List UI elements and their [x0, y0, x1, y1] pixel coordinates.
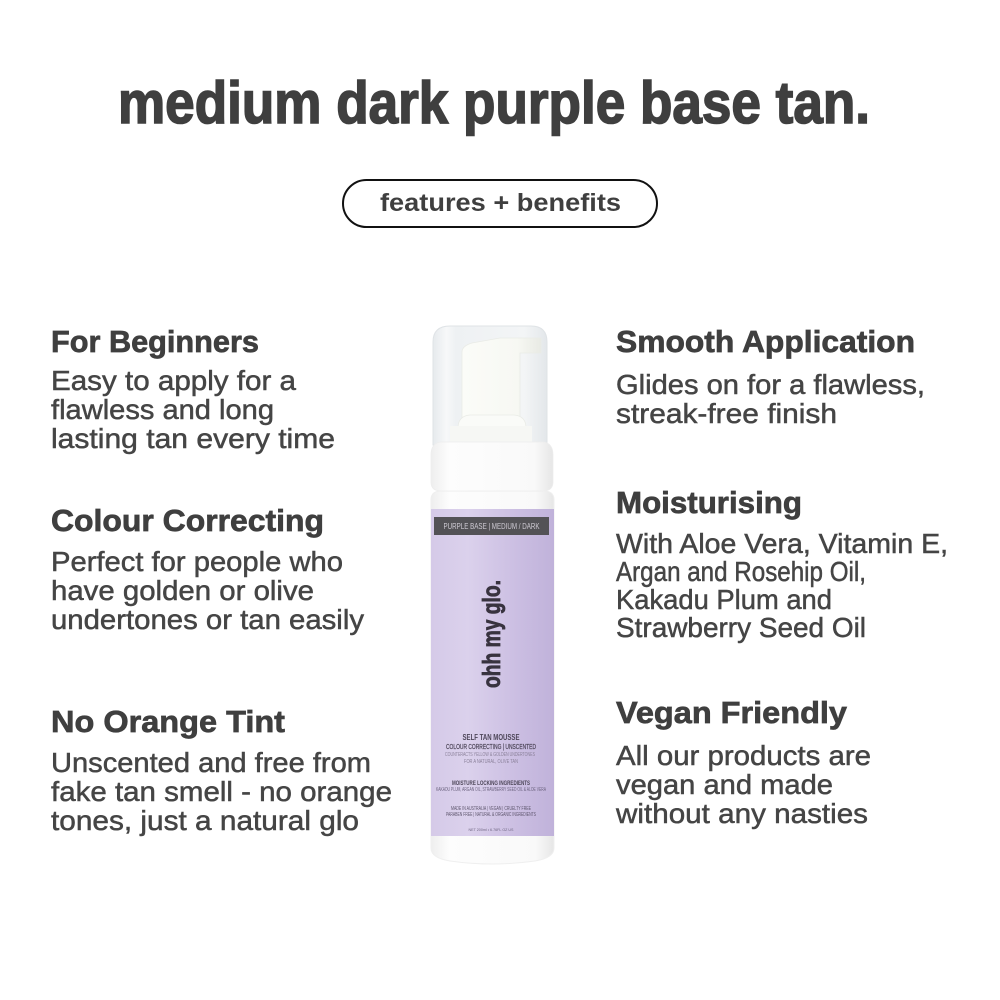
feature: For Beginners: Easy to apply for a [51, 365, 296, 396]
feature: Moisturising: Argan and Rosehip Oil, [616, 556, 866, 587]
title: medium dark purple base tan. [118, 70, 870, 136]
feature: Vegan Friendly: vegan and made [616, 769, 833, 800]
label copy [436, 733, 546, 832]
feature: Smooth Application: Glides on for a flawless, [616, 369, 925, 400]
label copy: FOR A NATURAL, OLIVE TAN [464, 759, 518, 765]
feature: No Orange Tint: No Orange Tint [51, 704, 285, 739]
feature: No Orange Tint [51, 704, 392, 836]
feature: For Beginners: flawless and long [51, 394, 274, 425]
feature: Moisturising: Kakadu Plum and [616, 584, 832, 615]
feature: For Beginners [51, 324, 335, 454]
label copy: MOISTURE LOCKING INGREDIENTS [452, 781, 530, 787]
feature: Moisturising: With Aloe Vera, Vitamin E, [616, 528, 948, 559]
feature: Colour Correcting: Perfect for people who [51, 546, 343, 577]
label copy: COUNTERACTS YELLOW & GOLDEN UNDERTONES [445, 752, 535, 758]
bottle body [431, 491, 554, 864]
feature: Moisturising: Strawberry Seed Oil [616, 612, 866, 643]
feature: No Orange Tint: Unscented and free from [51, 747, 371, 778]
label copy: MADE IN AUSTRALIA | VEGAN | CRUELTY FREE [451, 806, 531, 812]
feature: For Beginners: For Beginners [51, 324, 259, 359]
feature: Moisturising: Moisturising [616, 485, 802, 520]
feature: Vegan Friendly [615, 695, 871, 829]
feature: For Beginners: lasting tan every time [51, 423, 335, 454]
label copy: NET 200ml • 6.76FL OZ US [468, 827, 514, 832]
purple label [431, 509, 554, 836]
product: mousse bottle [431, 326, 554, 864]
feature: Colour Correcting: Colour Correcting [51, 503, 324, 538]
label copy: COLOUR CORRECTING | UNSCENTED [446, 744, 536, 751]
feature: Vegan Friendly: without any nasties [615, 798, 868, 829]
feature: Colour Correcting: undertones or tan easily [51, 604, 364, 635]
brand name: ohh my glo. [478, 580, 506, 688]
clear cap [433, 326, 547, 445]
label copy: KAKADU PLUM, ARGAN OIL, STRAWBERRY SEED OIL & ALOE VERA [436, 787, 546, 793]
subtitle pill [343, 180, 657, 227]
feature: Smooth Application [616, 324, 925, 429]
feature: Smooth Application: streak-free finish [616, 398, 837, 429]
feature: Colour Correcting [51, 503, 364, 635]
subtitle pill: features + benefits [380, 189, 621, 217]
feature: No Orange Tint: fake tan smell - no orange [51, 776, 392, 807]
feature: Smooth Application: Smooth Application [616, 324, 915, 359]
feature: Vegan Friendly: All our products are [616, 740, 871, 771]
feature: Vegan Friendly: Vegan Friendly [616, 695, 848, 730]
dark band [434, 517, 549, 535]
pump [462, 338, 541, 428]
feature: Moisturising [616, 485, 948, 643]
label copy: PARABEN FREE | NATURAL & ORGANIC INGREDIENTS [446, 812, 536, 818]
band text: PURPLE BASE | MEDIUM / DARK [444, 521, 540, 531]
label copy: SELF TAN MOUSSE [462, 733, 520, 742]
collar [431, 442, 553, 491]
feature: No Orange Tint: tones, just a natural glo [51, 805, 359, 836]
feature: Colour Correcting: have golden or olive [51, 575, 314, 606]
